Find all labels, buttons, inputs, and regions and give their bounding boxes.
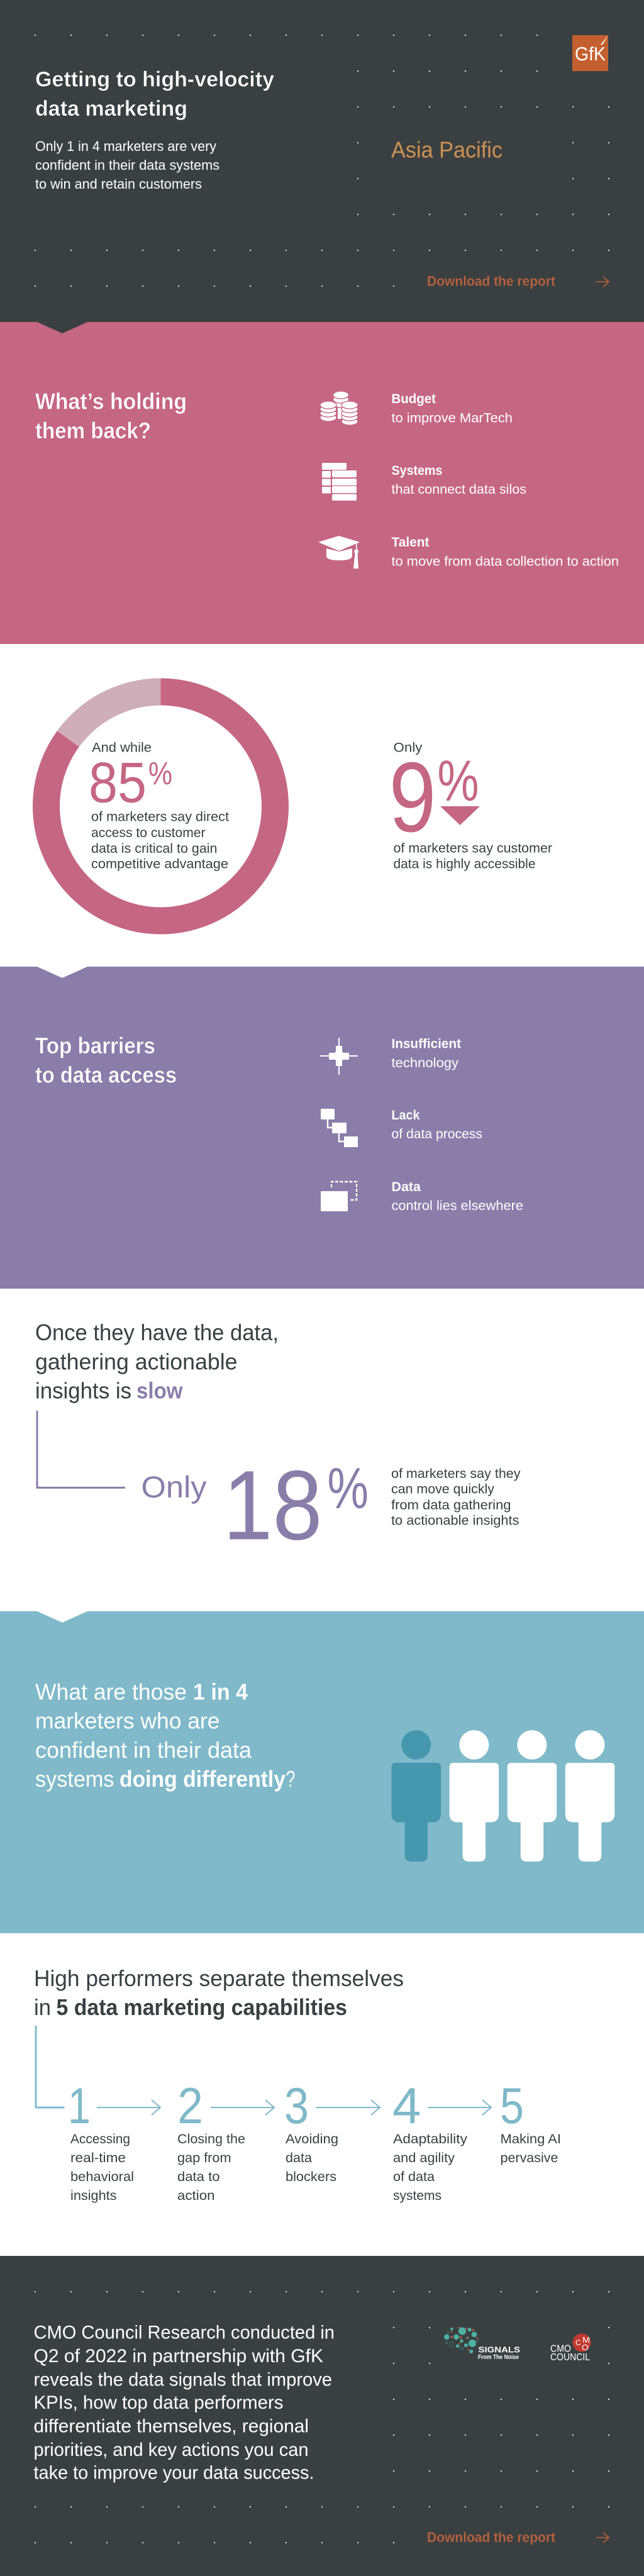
capability 4: systems	[393, 2189, 441, 2203]
text: systems: Systems	[391, 464, 443, 478]
icon: person 3	[508, 1730, 557, 1862]
panel: what's holding them back	[0, 322, 644, 644]
text: budget: Budget	[391, 392, 436, 406]
intro text: Only 1 in 4 marketers are very	[35, 138, 216, 154]
heading: 5 data marketing capabilities	[57, 1994, 347, 2020]
stat: 18%	[141, 1450, 369, 1561]
text: 9% stat: of marketers say customer	[394, 841, 552, 855]
connector line	[36, 2026, 64, 2107]
heading: Once they have the data,	[35, 1319, 279, 1345]
text: 18% description: from data gathering	[391, 1498, 511, 1513]
intro text: to win and retain customers	[35, 176, 202, 192]
text: systems	[391, 464, 526, 497]
text: data: control lies elsewhere	[391, 1199, 523, 1213]
capability 2: Closing the	[177, 2132, 245, 2146]
icon: process flow	[321, 1109, 358, 1147]
panel: top barriers	[0, 967, 644, 1289]
capability 1: real-time	[70, 2151, 126, 2165]
logo: CMO Council: M	[582, 2335, 590, 2345]
capability 3: Avoiding	[286, 2132, 338, 2146]
capability 4: Adaptability	[393, 2132, 468, 2146]
text: lack	[391, 1108, 482, 1141]
icon: systems	[322, 463, 357, 501]
capability 3: data	[286, 2151, 312, 2165]
heading	[35, 1319, 279, 1404]
capability 4: 4	[392, 2078, 421, 2135]
arrow 1 to 2	[97, 2100, 160, 2115]
stat: 18%: %	[327, 1457, 369, 1521]
capability 2: gap from	[177, 2151, 231, 2165]
capability 1: 1	[68, 2078, 91, 2135]
capability 4: of data	[393, 2170, 435, 2184]
body text: Q2 of 2022 in partnership with GfK	[34, 2346, 323, 2367]
text: data: Data	[391, 1180, 421, 1194]
logo: CMO Council: C	[575, 2338, 581, 2347]
text: 9% stat: %	[438, 749, 479, 813]
body text: CMO Council Research conducted in	[34, 2322, 335, 2343]
body text: differentiate themselves, regional	[34, 2416, 309, 2436]
heading: them back?	[35, 418, 151, 443]
text: lack: of data process	[391, 1127, 482, 1141]
text: 18% description: of marketers say they	[391, 1467, 521, 1481]
logo: signals from the noise: SIGNALS	[478, 2345, 520, 2355]
capability 1: behavioral	[70, 2170, 134, 2184]
heading	[35, 1033, 177, 1088]
donut chart: 85%	[47, 692, 275, 921]
title: data marketing	[35, 97, 187, 121]
icon: person 2	[450, 1730, 499, 1862]
icon: data control	[321, 1182, 357, 1211]
logo: GfK	[572, 35, 608, 71]
capability 1: insights	[70, 2189, 117, 2203]
text: budget	[391, 392, 513, 425]
heading: slow	[136, 1377, 183, 1404]
icon: technology node	[320, 1038, 358, 1075]
title: Getting to high-velocity	[35, 68, 274, 92]
icon: person 4	[565, 1730, 614, 1862]
arrow 2 to 3	[211, 2100, 274, 2115]
icon: arrow	[596, 2533, 609, 2543]
capability 5: Making AI	[501, 2132, 561, 2146]
heading: What are those	[35, 1679, 187, 1704]
capability 1: Accessing	[70, 2132, 130, 2146]
logo: signals from the noise	[440, 2324, 520, 2361]
logo: CMO Council: CMO	[550, 2343, 571, 2355]
text: insufficient: technology	[391, 1056, 459, 1070]
heading	[34, 1965, 404, 2020]
panel: footer	[0, 2256, 644, 2576]
stat: 18%: 18	[223, 1450, 322, 1561]
text: talent	[391, 535, 619, 569]
text: 9% stat: Only	[394, 741, 423, 755]
capability 5: 5	[500, 2078, 524, 2135]
text: 18% description: can move quickly	[391, 1482, 494, 1497]
capability 2: 2	[177, 2078, 203, 2135]
logo: CMO Council: COUNCIL	[550, 2352, 590, 2363]
heading	[35, 389, 187, 443]
heading: to data access	[35, 1062, 177, 1088]
capability 2: data to	[177, 2170, 220, 2184]
title	[35, 68, 274, 121]
text: budget: to improve MarTech	[391, 411, 513, 425]
capability 4	[392, 2078, 468, 2203]
heading: Top barriers	[35, 1033, 155, 1058]
icon: arrow	[596, 277, 609, 287]
capability 1	[68, 2078, 134, 2203]
capability 4: and agility	[393, 2151, 455, 2165]
connector line	[37, 1411, 125, 1488]
logo: CMO Council: O	[582, 2343, 589, 2352]
icon: highlighted person	[391, 1730, 441, 1862]
panel: data access stats	[0, 644, 644, 967]
text: 18% description	[391, 1467, 521, 1528]
text: 85% stat: access to customer	[91, 826, 205, 840]
heading: ?	[286, 1766, 296, 1792]
heading: systems	[35, 1766, 114, 1792]
text: systems: that connect data silos	[391, 482, 526, 497]
body text: take to improve your data success.	[34, 2463, 314, 2483]
capability 2: action	[177, 2189, 215, 2203]
text: talent: Talent	[391, 535, 429, 550]
intro text: confident in their data systems	[35, 157, 219, 173]
text: 9% stat: 9	[389, 742, 436, 853]
text: 85% stat	[89, 741, 229, 872]
text: insufficient	[391, 1036, 461, 1070]
text: 85% stat: of marketers say direct	[91, 810, 229, 824]
capability 3: blockers	[286, 2170, 336, 2184]
heading: What’s holding	[35, 389, 187, 414]
stat: 18%: Only	[141, 1471, 206, 1504]
logo: GfK: GfK	[575, 43, 606, 65]
capability 3	[284, 2078, 338, 2184]
intro text	[35, 138, 219, 192]
capability 5	[500, 2078, 561, 2165]
heading: insights is	[35, 1377, 131, 1404]
heading	[35, 1679, 296, 1792]
capability 5: pervasive	[501, 2151, 558, 2165]
heading: gathering actionable	[35, 1348, 238, 1375]
heading: confident in their data	[35, 1737, 252, 1763]
text: talent: to move from data collection to action	[391, 555, 619, 569]
text: insufficient: Insufficient	[391, 1036, 461, 1052]
body text: reveals the data signals that improve	[34, 2370, 332, 2390]
capability 2	[177, 2078, 245, 2203]
heading: doing differently	[119, 1766, 286, 1792]
icon: down triangle	[440, 806, 480, 825]
arrow 4 to 5	[428, 2100, 491, 2115]
icon: coins	[320, 391, 358, 425]
capability 3: 3	[284, 2078, 309, 2135]
download link: Download the report	[427, 2529, 556, 2545]
panel: 5 capabilities	[0, 1933, 644, 2256]
text: 85% stat: %	[148, 755, 172, 791]
panel: slow insights	[0, 1289, 644, 1611]
body text: KPIs, how top data performers	[34, 2392, 283, 2413]
text: data	[391, 1180, 523, 1213]
text: 9% stat: data is highly accessible	[394, 857, 536, 872]
heading: in	[34, 1994, 51, 2020]
logo: signals from the noise: From The Noise	[478, 2354, 519, 2361]
body text: priorities, and key actions you can	[34, 2440, 308, 2460]
heading: High performers separate themselves	[34, 1965, 404, 1991]
text: 85% stat: data is critical to gain	[91, 841, 218, 856]
body text	[34, 2322, 335, 2483]
download link: Download the report	[427, 273, 556, 289]
text: 85% stat: 85	[89, 751, 147, 815]
panel: header	[0, 0, 644, 322]
heading: marketers who are	[35, 1708, 220, 1733]
icon: graduation cap	[318, 536, 360, 569]
text: 9% stat	[389, 741, 552, 872]
arrow 3 to 4	[316, 2100, 380, 2115]
region label: Asia Pacific	[391, 137, 502, 162]
panel: 1 in 4 marketers	[0, 1611, 644, 1933]
text: 85% stat: And while	[92, 741, 152, 755]
logo: CMO Council	[550, 2333, 591, 2363]
text: lack: Lack	[391, 1108, 420, 1123]
text: 85% stat: competitive advantage	[91, 857, 228, 872]
text: 18% description: to actionable insights	[391, 1513, 519, 1528]
heading: 1 in 4	[193, 1679, 248, 1704]
